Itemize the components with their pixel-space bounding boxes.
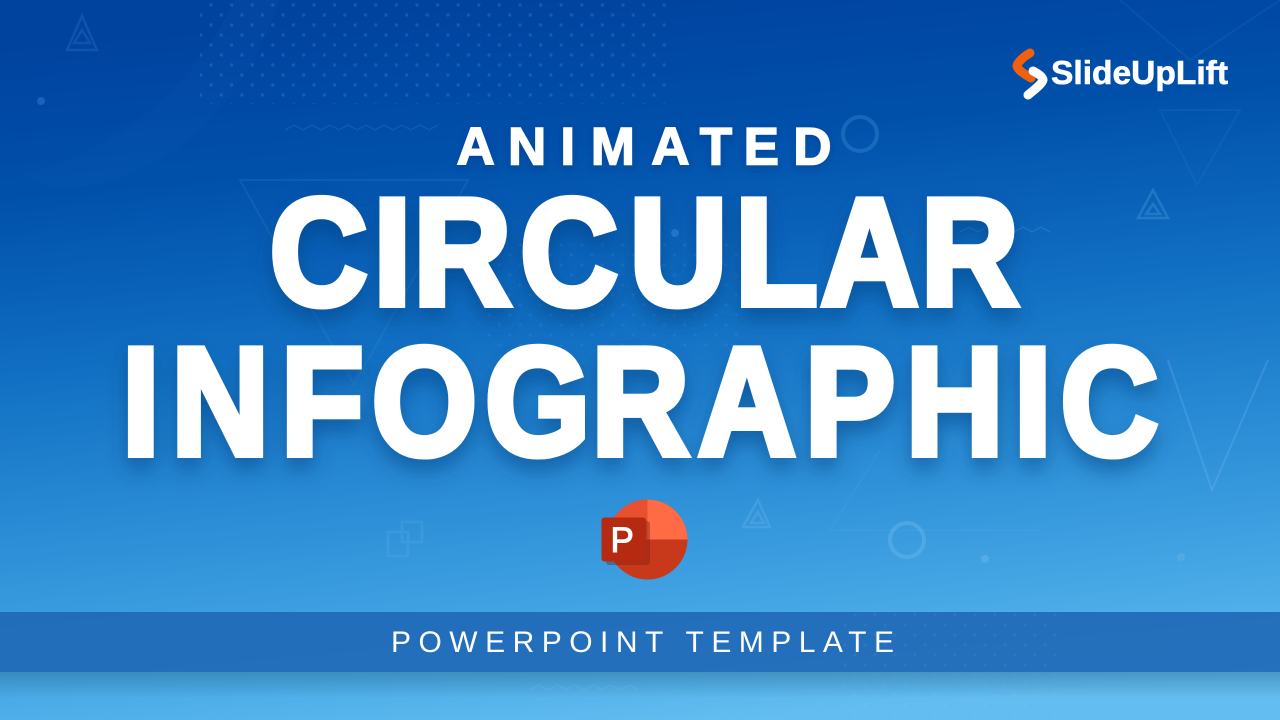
- title line: Circular: CIRCULAR: [270, 168, 1019, 337]
- banner label: POWERPOINT TEMPLATE: [391, 626, 894, 659]
- bottom band shadow: [0, 672, 1280, 698]
- icon: PowerPoint logo: P: [610, 521, 634, 560]
- icon: PowerPoint logo: [602, 500, 688, 580]
- title line: Infographic: INFOGRAPHIC: [122, 316, 1158, 487]
- heading: Animated: ANIMATED: [456, 118, 831, 176]
- icon: logo mark: [1017, 53, 1043, 95]
- logo wordmark: SlideUpLift: [1051, 54, 1228, 91]
- logo: SlideUpLift: [1017, 53, 1228, 95]
- banner: PowerPoint template: [0, 612, 1280, 672]
- heading: Circular Infographic: [122, 168, 1158, 487]
